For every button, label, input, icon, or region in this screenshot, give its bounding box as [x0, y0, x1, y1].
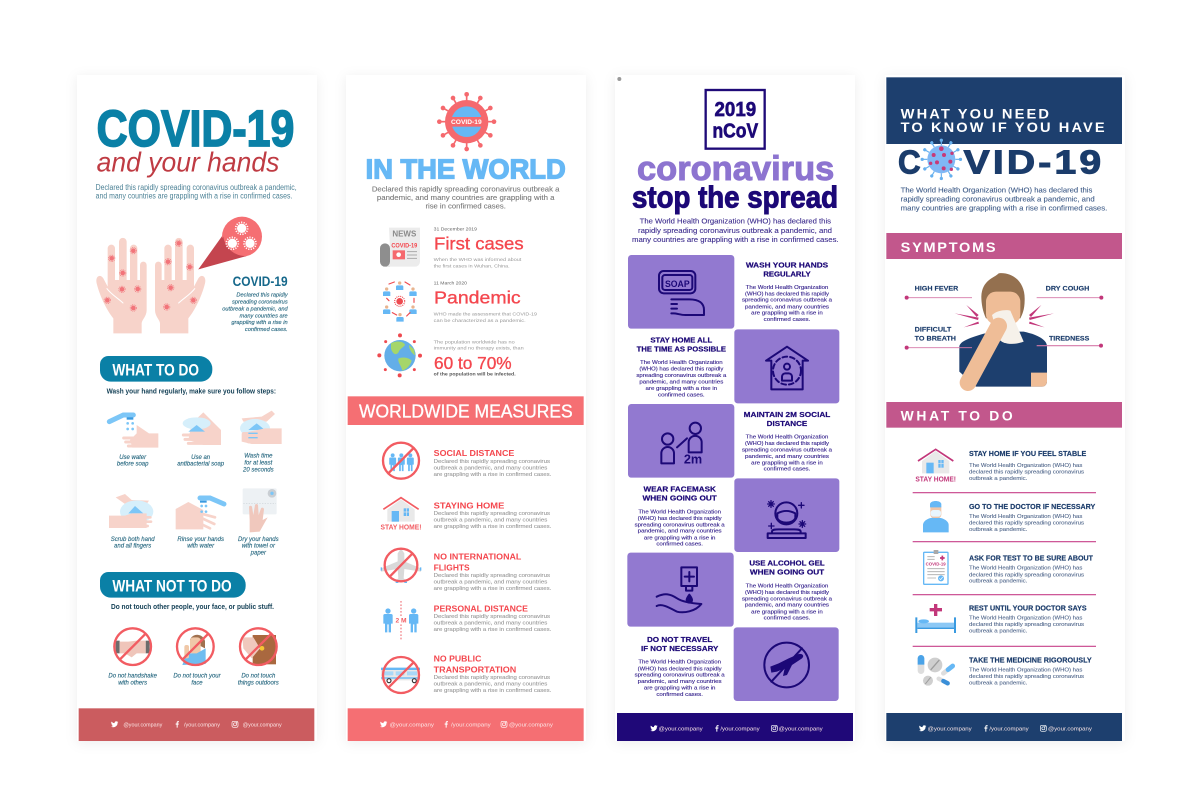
step: rinse hands: with water: [187, 544, 215, 550]
panel: in the world: [346, 75, 586, 741]
don't: touch face: face: [191, 680, 203, 686]
text: wear facemask: WHEN GOING OUT: [642, 494, 717, 503]
footer: social handles: @your.company: [243, 722, 282, 728]
measure: staying home: Declared this rapidly spreading coronavirus: [434, 511, 550, 517]
intro text: rise in confirmed cases.: [425, 201, 506, 210]
text: do not travel: (WHO) has declared this rapidly: [638, 666, 722, 672]
step: wash time: Wash time: [244, 454, 273, 460]
item: stay home: STAY HOME!: [915, 475, 956, 484]
measure: no international flights: Declared this rapidly spreading coronavirus: [434, 573, 550, 579]
heading: what to do: [100, 356, 212, 382]
measure: staying home: [380, 498, 551, 532]
text: wash your hands: pandemic, and many countries: [745, 304, 829, 310]
text: stay home: are grappling with a rise in: [645, 386, 717, 392]
step: rinse hands: Rinse your hands: [177, 537, 224, 543]
step: wash time: 20 seconds: [242, 467, 274, 473]
event: pandemic: [434, 281, 537, 324]
event: first cases: [434, 226, 524, 269]
callout: COVID-19 note: [222, 273, 289, 333]
card: soap image: SOAP: [665, 279, 690, 289]
event: pandemic: can be characterized as a pandemic.: [434, 318, 526, 324]
stat: 60 to 70%: 60 to 70%: [434, 353, 512, 373]
icon: globe with red dots: [377, 333, 422, 377]
header: what you need to know: TO KNOW IF YOU HAVE: [901, 119, 1107, 135]
text: stay home: pandemic, and many countries: [639, 379, 724, 385]
text: maintain distance: The World Health Organization: [746, 435, 828, 441]
text: maintain distance: are grappling with a rise in: [751, 460, 823, 466]
item: stay home: STAY HOME IF YOU FEEL STABLE: [969, 451, 1087, 458]
text: maintain distance: confirmed cases.: [764, 467, 810, 473]
heading: what to do: WHAT TO DO: [901, 408, 1015, 424]
measure: no international flights: NO INTERNATIONAL: [434, 552, 522, 562]
text: wear facemask: (WHO) has declared this rapidly: [638, 516, 722, 522]
text: stay home: confirmed cases.: [658, 392, 705, 398]
intro text: The World Health Organization (WHO) has declared this: [640, 217, 831, 226]
text: alcohol gel: pandemic, and many countries: [745, 603, 829, 609]
measure: personal distance: are grappling with a rise in confirmed cases.: [434, 627, 551, 633]
text: wash your hands: are grappling with a rise in: [751, 311, 823, 317]
icon: spreading people ring: [383, 281, 417, 322]
item: go to doctor: The World Health Organization (WHO) has: [969, 514, 1083, 520]
heading: worldwide measures: [348, 396, 584, 425]
measure: personal distance: outbreak a pandemic, and many countries: [434, 621, 548, 627]
text: do not travel: spreading coronavirus outbreak a: [635, 673, 725, 679]
symptom: difficult to breath: DIFFICULT: [915, 327, 951, 334]
text: alcohol gel: confirmed cases.: [764, 616, 810, 622]
intro text: many countries are grappling with a rise in confirmed cases.: [901, 204, 1107, 213]
intro text: Declared this rapidly spreading coronavirus outbreak a: [372, 185, 560, 194]
intro text: [96, 183, 297, 200]
symptom: difficult to breath: TO BREATH: [915, 336, 956, 343]
step: scrub hands: and all fingers: [114, 544, 151, 550]
measure: no international flights: FLIGHTS: [434, 562, 470, 572]
symptom: dry cough: DRY COUGH: [1046, 286, 1090, 293]
step: dry hands: paper: [250, 551, 267, 557]
text: alcohol gel: USE ALCOHOL GEL: [749, 559, 825, 568]
measure: personal distance: 2 M: [395, 618, 407, 625]
text: alcohol gel: (WHO) has declared this rapidly: [745, 590, 829, 596]
item: ask for test: COVID-19: [926, 562, 946, 567]
item: take medicine: outbreak a pandemic.: [969, 680, 1027, 686]
title: COVID-19 with virus: C: [898, 143, 921, 180]
item: stay home: declared this rapidly spreading coronavirus: [969, 470, 1084, 476]
intro text: rapidly spreading coronavirus outbreak a pandemic, and: [638, 226, 832, 235]
item: stay home: The World Health Organization (WHO) has: [969, 463, 1083, 469]
measure: no public transportation: are grappling with a rise in confirmed cases.: [434, 688, 551, 694]
text: alcohol gel: The World Health Organization: [746, 583, 828, 589]
text: do not travel: confirmed cases.: [656, 692, 703, 698]
symptom: high fever: [905, 286, 972, 300]
text: do not travel: The World Health Organization: [638, 660, 721, 666]
event: first cases: the first cases in Wuhan, China.: [434, 263, 510, 269]
item: take medicine: declared this rapidly spreading coronavirus: [969, 674, 1084, 680]
text: wear facemask: pandemic, and many countries: [638, 529, 722, 535]
footer: social handles: /your.company: [720, 726, 760, 732]
measure: staying home: STAY HOME!: [380, 523, 421, 532]
measure: staying home: STAYING HOME: [434, 500, 505, 510]
text: wash your hands: spreading coronavirus outbreak a: [742, 298, 832, 304]
heading: what not to do: WHAT NOT TO DO: [112, 577, 232, 596]
measure: social distance: outbreak a pandemic, and many countries: [434, 466, 548, 472]
footer: social handles: @your.company: [390, 722, 434, 728]
text: do not travel: are grappling with a rise in: [644, 686, 716, 692]
intro text: [632, 217, 839, 244]
step: rinse hands: [176, 498, 224, 550]
text: maintain distance: [742, 410, 832, 473]
measure: staying home: outbreak a pandemic, and many countries: [434, 518, 548, 524]
intro text: rapidly spreading coronavirus outbreak a pandemic, and: [901, 195, 1095, 204]
step: use water: before soap: [117, 462, 149, 468]
don't: handshake: with others: [118, 680, 147, 686]
text: wear facemask: The World Health Organization: [638, 510, 721, 516]
text: wear facemask: [635, 485, 725, 548]
card: alcohol gel image: [627, 553, 734, 627]
heading: symptoms: [886, 233, 1122, 259]
symptom: tiredness: TIREDNESS: [1049, 336, 1090, 343]
measure: no public transportation: Declared this rapidly spreading coronavirus: [434, 675, 550, 681]
text: maintain distance: MAINTAIN 2M SOCIAL: [744, 410, 831, 419]
card: home image: [734, 329, 839, 403]
title: in the world: IN THE WORLD: [366, 153, 566, 184]
don't: touch face: Do not touch your: [173, 674, 222, 680]
step: dry hands: Dry your hands: [238, 537, 279, 543]
don't: handshake: Do not handshake: [108, 674, 158, 680]
panel: coronavirus stop the spread: [615, 75, 855, 741]
icon: newspaper: COVID-19: [391, 243, 418, 249]
intro text: and many countries are grappling with a rise in confirmed cases.: [96, 191, 292, 200]
icon: virus badge: COVID-19: [451, 119, 482, 126]
measure: staying home: are grappling with a rise in confirmed cases.: [434, 524, 551, 530]
item: rest: The World Health Organization (WHO) has: [969, 615, 1083, 621]
callout: COVID-19 note: Declared this rapidly: [236, 293, 289, 299]
panel: COVID-19 and your hands: [77, 75, 317, 741]
item: stay home: [915, 449, 1087, 484]
text: stay home: THE TIME AS POSSIBLE: [637, 345, 726, 354]
text: wear facemask: confirmed cases.: [656, 542, 703, 548]
event: pandemic: 11 March 2020: [434, 281, 467, 287]
measure: no international flights: outbreak a pandemic, and many countries: [434, 580, 548, 586]
item: go to doctor: [923, 501, 1096, 533]
item: rest: outbreak a pandemic.: [969, 628, 1027, 634]
icon: small corner mark: [617, 77, 621, 81]
measure: personal distance: [383, 601, 551, 639]
card: no travel image: [734, 627, 839, 701]
text: alcohol gel: are grappling with a rise in: [751, 609, 823, 615]
measure: no international flights: are grappling with a rise in confirmed cases.: [434, 586, 551, 592]
measure: social distance: are grappling with a rise in confirmed cases.: [434, 472, 551, 478]
callout: COVID-19 note: many countries are: [240, 313, 288, 319]
measure: no public transportation: outbreak a pandemic, and many countries: [434, 682, 548, 688]
stat: 60 to 70%: [434, 340, 524, 377]
card: soap image: [628, 255, 734, 329]
footer: social handles: @your.company: [779, 726, 823, 732]
icon: newspaper: NEWS: [392, 230, 417, 239]
stat: 60 to 70%: The population worldwide has no: [434, 340, 515, 346]
title: stop the spread: stop the spread: [632, 180, 838, 214]
text: do not travel: pandemic, and many countries: [638, 679, 722, 685]
icon: newspaper: [380, 228, 420, 267]
callout: COVID-19 note: grappling with a rise in: [231, 320, 288, 326]
item: ask for test: ASK FOR TEST TO BE SURE ABOUT: [969, 556, 1094, 563]
item: go to doctor: GO TO THE DOCTOR IF NECESSARY: [969, 504, 1096, 511]
text: wear facemask: WEAR FACEMASK: [643, 485, 717, 494]
symptom: difficult to breath: [905, 327, 972, 350]
measure: social distance: SOCIAL DISTANCE: [434, 448, 515, 458]
step: dry hands: [238, 488, 279, 557]
don't: handshake: [108, 628, 158, 686]
intro text: Declared this rapidly spreading coronavirus outbreak a pandemic,: [96, 183, 297, 192]
subtitle: and your hands: and your hands: [97, 147, 279, 178]
intro text: [372, 185, 560, 210]
text: alcohol gel: spreading coronavirus outbreak a: [742, 596, 832, 602]
intro text: [901, 185, 1107, 213]
text: wash your hands: (WHO) has declared this rapidly: [745, 291, 829, 297]
item: ask for test: outbreak a pandemic.: [969, 579, 1027, 585]
footer: social handles: [348, 708, 584, 741]
header: what you need to know: WHAT YOU NEED: [901, 105, 1051, 121]
intro text: pandemic, and many countries are grappling with a: [377, 193, 555, 202]
instruction text: Wash your hand regularly, make sure you follow steps:: [107, 387, 276, 396]
callout: COVID-19 note: COVID-19: [233, 273, 288, 289]
item: ask for test: declared this rapidly spreading coronavirus: [969, 572, 1084, 578]
text: wash your hands: confirmed cases.: [764, 317, 810, 323]
symptom: high fever: HIGH FEVER: [915, 286, 959, 293]
step: dry hands: with towel or: [242, 544, 276, 550]
callout: COVID-19 note: spreading coronavirus: [232, 299, 288, 305]
item: stay home: outbreak a pandemic.: [969, 476, 1027, 482]
step: use water: [109, 415, 158, 468]
step: antibacterial soap: Use an: [191, 455, 211, 461]
don't: touch outdoor things: things outdoors: [238, 680, 279, 686]
badge: 2019 nCoV: [706, 90, 765, 149]
callout: COVID-19 note: confirmed cases.: [245, 327, 288, 333]
symptom: tiredness: [1037, 336, 1103, 348]
header: what you need to know: [886, 77, 1122, 144]
text: wash your hands: WASH YOUR HANDS: [746, 260, 828, 269]
text: maintain distance: spreading coronavirus outbreak a: [742, 448, 832, 454]
text: stay home: STAY HOME ALL: [650, 336, 713, 345]
text: maintain distance: DISTANCE: [767, 419, 807, 428]
footer: social handles: /your.company: [184, 722, 220, 728]
icon: two hands with virus spots: [96, 238, 205, 333]
text: wash your hands: The World Health Organization: [746, 285, 828, 291]
measure: no public transportation: NO PUBLIC: [434, 654, 482, 664]
text: maintain distance: (WHO) has declared this rapidly: [745, 441, 829, 447]
measure: no public transportation: [381, 654, 551, 694]
badge: 2019 nCoV: 2019: [714, 98, 756, 121]
heading: what not to do: [100, 572, 246, 598]
step: scrub hands: Scrub both hand: [111, 537, 155, 543]
event: pandemic: WHO made the assessment that COVID-19: [434, 312, 537, 318]
event: first cases: 31 December 2019: [434, 226, 477, 232]
icon: virus badge: [437, 92, 496, 151]
item: ask for test: The World Health Organization (WHO) has: [969, 566, 1083, 572]
icon: magnifier pin with viruses: [198, 217, 262, 269]
warning text: Do not touch other people, your face, or public stuff.: [111, 602, 274, 611]
intro text: The World Health Organization (WHO) has declared this: [901, 185, 1093, 194]
text: maintain distance: pandemic, and many countries: [745, 454, 829, 460]
text: stay home: spreading coronavirus outbreak a: [636, 373, 726, 379]
panel: what you need to know: [885, 75, 1125, 741]
footer: social handles: @your.company: [123, 722, 162, 728]
item: rest: REST UNTIL YOUR DOCTOR SAYS: [969, 605, 1087, 612]
text: wear facemask: spreading coronavirus outbreak a: [635, 522, 725, 528]
title: COVID-19: COVID-19: [97, 100, 294, 157]
measure: personal distance: Declared this rapidly spreading coronavirus: [434, 614, 550, 620]
text: wash your hands: REGULARLY: [763, 270, 811, 279]
step: antibacterial soap: [177, 412, 225, 468]
heading: symptoms: SYMPTOMS: [901, 239, 997, 255]
text: stay home: [636, 336, 726, 398]
don't: touch face: [173, 628, 222, 686]
step: scrub hands: [109, 494, 155, 550]
event: first cases: First cases: [434, 233, 524, 253]
footer: social handles: @your.company: [1048, 726, 1092, 732]
text: wear facemask: are grappling with a rise in: [644, 535, 716, 541]
heading: what to do: [886, 402, 1122, 428]
item: rest: declared this rapidly spreading coronavirus: [969, 622, 1084, 628]
illustration: coughing person: [955, 273, 1054, 387]
symptom: dry cough: [1037, 286, 1103, 300]
step: antibacterial soap: antibacterial soap: [177, 462, 225, 468]
event: first cases: When the WHO was informed about: [434, 257, 522, 263]
text: do not travel: IF NOT NECESSARY: [641, 644, 718, 653]
step: wash time: [240, 411, 282, 473]
footer: social handles: [886, 713, 1122, 741]
item: ask for test: [924, 550, 1094, 585]
text: alcohol gel: [742, 559, 832, 622]
item: take medicine: TAKE THE MEDICINE RIGOROUSLY: [969, 657, 1092, 664]
measure: social distance: Declared this rapidly spreading coronavirus: [434, 459, 550, 465]
text: do not travel: DO NOT TRAVEL: [647, 635, 713, 644]
footer: social handles: [79, 708, 314, 741]
measure: personal distance: PERSONAL DISTANCE: [434, 603, 528, 613]
footer: social handles: @your.company: [928, 726, 972, 732]
event: pandemic: Pandemic: [434, 288, 521, 308]
measure: no international flights: [381, 548, 551, 592]
stat: 60 to 70%: of the population will be infected.: [434, 371, 516, 377]
step: use water: Use water: [119, 455, 147, 461]
footer: social handles: @your.company: [509, 722, 553, 728]
text: stay home: (WHO) has declared this rapidly: [639, 366, 724, 372]
item: go to doctor: outbreak a pandemic.: [969, 527, 1027, 533]
don't: touch outdoor things: [238, 628, 279, 686]
item: go to doctor: declared this rapidly spreading coronavirus: [969, 521, 1084, 527]
heading: what to do: WHAT TO DO: [112, 361, 199, 380]
measure: social distance: [383, 443, 551, 479]
item: rest: [916, 604, 1087, 634]
item: take medicine: The World Health Organization (WHO) has: [969, 667, 1083, 673]
don't: touch outdoor things: Do not touch: [241, 674, 276, 680]
step: wash time: for at least: [244, 460, 273, 466]
text: alcohol gel: WHEN GOING OUT: [750, 568, 825, 577]
card: distance image: [628, 404, 734, 478]
card: facemask image: [734, 478, 839, 552]
heading: worldwide measures: WORLDWIDE MEASURES: [359, 400, 573, 421]
badge: 2019 nCoV: nCoV: [712, 120, 758, 143]
footer: social handles: [617, 713, 853, 741]
stat: 60 to 70%: immunity and no therapy exists, than: [434, 346, 524, 352]
callout: COVID-19 note: outbreak a pandemic, and: [222, 306, 289, 312]
text: stay home: The World Health Organization: [640, 360, 723, 366]
title: COVID-19 with virus: VID-19: [964, 143, 1104, 180]
text: do not travel: [635, 635, 725, 698]
footer: social handles: /your.company: [989, 726, 1029, 732]
measure: no public transportation: TRANSPORTATION: [434, 664, 516, 674]
footer: social handles: @your.company: [659, 726, 703, 732]
footer: social handles: /your.company: [451, 722, 491, 728]
text: wash your hands: [742, 260, 832, 323]
title: COVID-19 with virus: [898, 139, 1104, 180]
card: distance image: 2m: [684, 452, 702, 466]
title: coronavirus: coronavirus: [637, 150, 834, 188]
item: take medicine: [918, 655, 1092, 686]
intro text: many countries are grappling with a rise in confirmed cases.: [632, 235, 839, 244]
